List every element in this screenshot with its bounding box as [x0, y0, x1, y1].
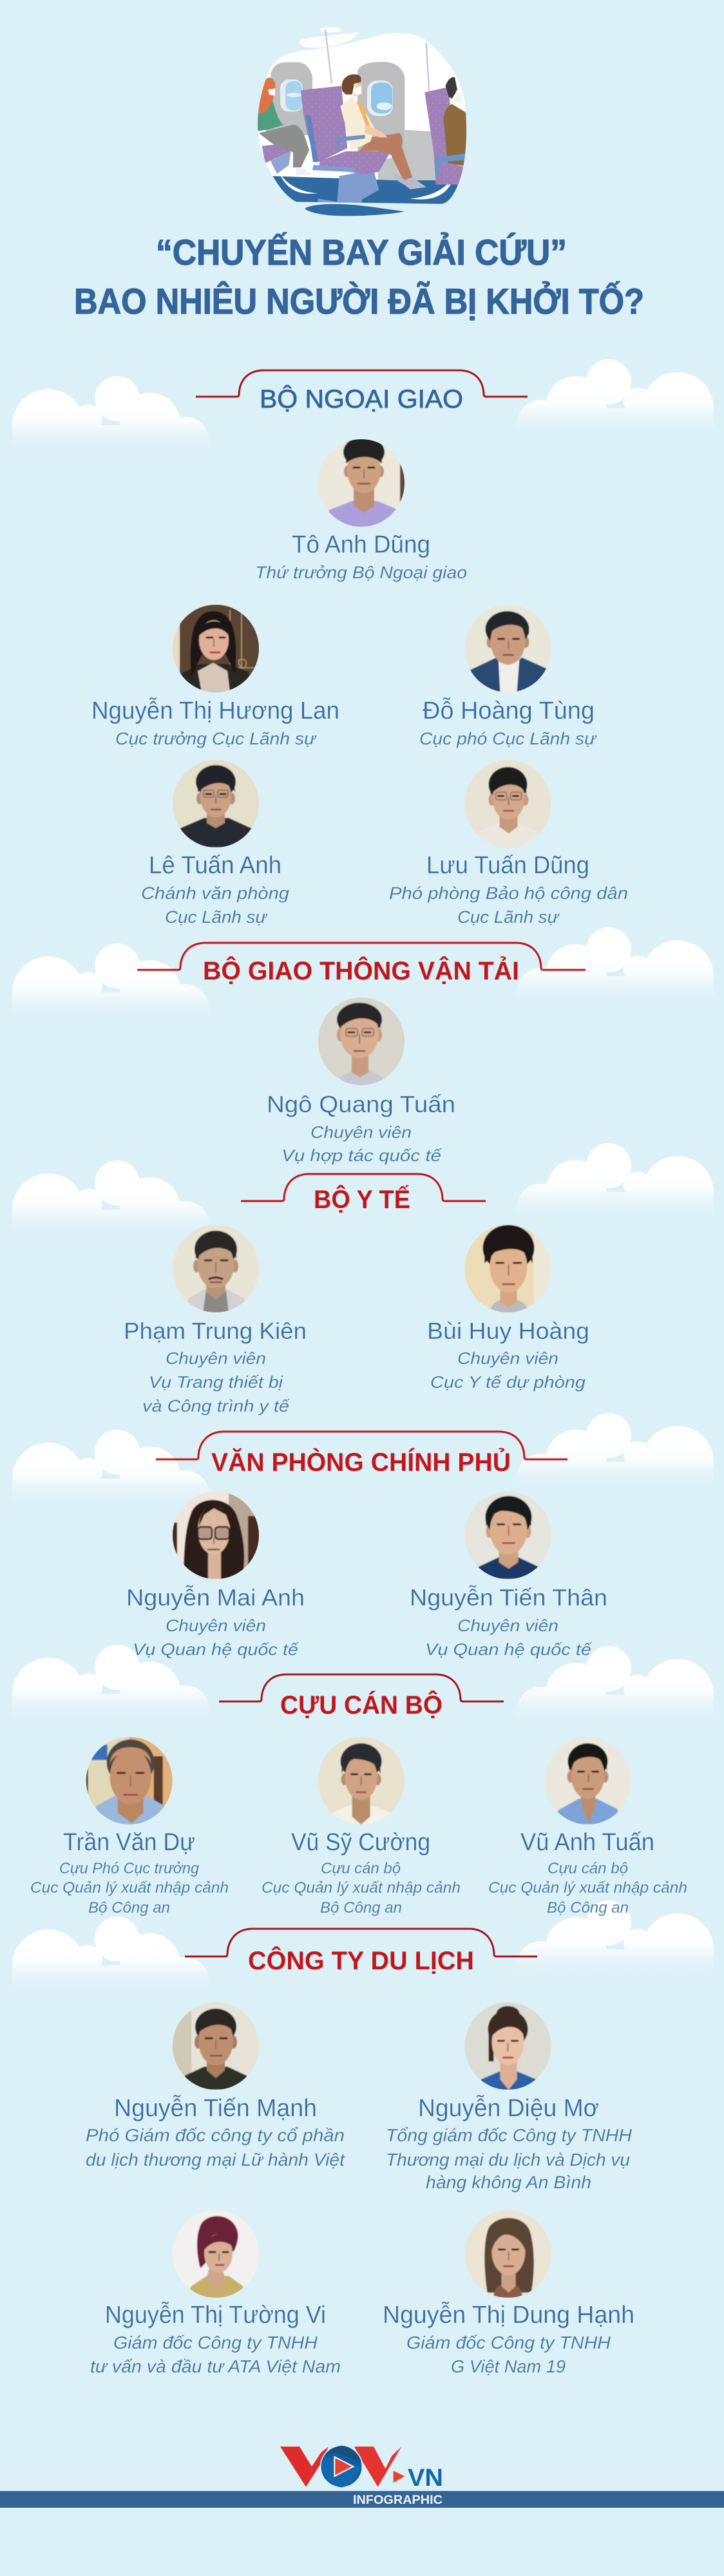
role: Chuyên viên: [457, 1616, 558, 1635]
person: Phạm Trung Kiên: [124, 1224, 307, 1416]
heading: Bộ Giao thông Vận tải: [137, 943, 586, 985]
title: “CHUYẾN BAY GIẢI CỨU”: [156, 232, 567, 272]
role: [86, 2125, 345, 2170]
photo: Nguyễn Thị Tường Vi: [171, 2209, 261, 2299]
heading: Bộ Ngoại giao: [196, 370, 528, 413]
logo: VOV.VN Infographic: [280, 2446, 443, 2507]
role: Cục Quản lý xuất nhập cảnh: [488, 1879, 687, 1897]
role: Vụ Quan hệ quốc tế: [425, 1640, 593, 1659]
role: G Việt Nam 19: [451, 2356, 566, 2376]
role: Cục Quản lý xuất nhập cảnh: [30, 1879, 229, 1897]
name: Nguyễn Diệu Mơ: [418, 2094, 599, 2122]
role: [141, 884, 289, 927]
role: Chánh văn phòng: [141, 884, 289, 903]
clouds behind section headings: [12, 359, 714, 2006]
photo: Lưu Tuấn Dũng: [462, 759, 553, 849]
name: Phạm Trung Kiên: [124, 1318, 307, 1344]
person: Trần Văn Dự: [30, 1736, 229, 1917]
person: Ngô Quang Tuấn: [267, 996, 455, 1165]
photo: Nguyễn Diệu Mơ: [462, 2001, 553, 2091]
photo: Đỗ Hoàng Tùng: [462, 603, 553, 694]
photo: Bùi Huy Hoàng: [462, 1224, 553, 1314]
person: Nguyễn Mai Anh: [126, 1490, 305, 1659]
person: Nguyễn Thị Tường Vi: [90, 2209, 341, 2376]
heading: Văn phòng Chính phủ: VĂN PHÒNG CHÍNH PHỦ: [211, 1447, 511, 1477]
photo: Tô Anh Dũng: [316, 437, 406, 528]
role: Bộ Công an: [547, 1899, 629, 1917]
panel: Bộ Giao thông Vận tải: [137, 943, 586, 1165]
role: [488, 1860, 687, 1917]
person: Đỗ Hoàng Tùng: [419, 603, 597, 748]
photo: Trần Văn Dự: [84, 1736, 175, 1826]
title: [74, 232, 644, 321]
photo: Lê Tuấn Anh: [171, 759, 261, 849]
logo: VOV.VN Infographic: VN: [408, 2465, 443, 2492]
person: Lê Tuấn Anh: [141, 759, 289, 927]
role: [281, 1122, 443, 1165]
role: Cục Y tế dự phòng: [430, 1372, 586, 1392]
role: Cục Lãnh sự: [457, 907, 560, 927]
role: và Công trình y tế: [142, 1396, 291, 1416]
role: Phó Giám đốc công ty cổ phần: [86, 2125, 345, 2145]
name: Vũ Sỹ Cường: [291, 1829, 430, 1856]
role: Cựu Phó Cục trưởng: [59, 1860, 200, 1877]
role: Chuyên viên: [310, 1122, 412, 1142]
photo: Nguyễn Thị Dung Hạnh: [462, 2209, 553, 2299]
role: Cục phó Cục Lãnh sự: [419, 729, 597, 748]
role: Giám đốc Công ty TNHH: [406, 2333, 611, 2353]
person: Nguyễn Thị Dung Hạnh: [383, 2209, 634, 2376]
name: Đỗ Hoàng Tùng: [423, 697, 595, 724]
role: tư vấn và đầu tư ATA Việt Nam: [90, 2356, 341, 2376]
person: Lưu Tuấn Dũng: [389, 759, 628, 927]
role: Tổng giám đốc Công ty TNHH: [386, 2125, 633, 2145]
role: du lịch thương mại Lữ hành Việt: [86, 2150, 345, 2170]
logo: VOV.VN Infographic: INFOGRAPHIC: [353, 2494, 443, 2507]
footer band: [0, 2491, 724, 2508]
role: Bộ Công an: [88, 1899, 170, 1917]
heading: Công ty du lịch: [185, 1929, 537, 1975]
role: Phó phòng Bảo hộ công dân: [389, 884, 628, 903]
role: Vụ Trang thiết bị: [149, 1372, 283, 1392]
role: Chuyên viên: [166, 1616, 266, 1635]
title: BAO NHIÊU NGƯỜI ĐÃ BỊ KHỞI TỐ?: [74, 281, 644, 321]
person: Nguyễn Thị Hương Lan: [91, 603, 339, 748]
name: Ngô Quang Tuấn: [267, 1091, 455, 1117]
role: [133, 1616, 300, 1659]
person: Tô Anh Dũng: [255, 437, 467, 582]
photo: Nguyễn Mai Anh: [171, 1490, 261, 1580]
name: Nguyễn Tiến Thân: [410, 1584, 607, 1611]
role: Cựu cán bộ: [321, 1860, 401, 1877]
illustration: passengers in airplane cabin: [258, 27, 466, 216]
person: Vũ Sỹ Cường: [262, 1736, 461, 1917]
role: Cựu cán bộ: [548, 1860, 628, 1877]
role: Bộ Công an: [320, 1899, 402, 1917]
photo: Nguyễn Tiến Mạnh: [171, 2001, 261, 2091]
photo: Nguyễn Tiến Thân: [462, 1490, 553, 1580]
role: [406, 2333, 611, 2376]
heading: Bộ Giao thông Vận tải: BỘ GIAO THÔNG VẬN TẢI: [203, 956, 519, 985]
role: [30, 1860, 229, 1917]
name: Nguyễn Thị Tường Vi: [105, 2301, 326, 2329]
panel: Văn phòng Chính phủ: [126, 1432, 607, 1659]
role: Vụ hợp tác quốc tế: [281, 1146, 443, 1165]
role: Cục trưởng Cục Lãnh sự: [115, 729, 317, 748]
name: Vũ Anh Tuấn: [520, 1829, 654, 1856]
name: Bùi Huy Hoàng: [427, 1318, 589, 1344]
role: [386, 2125, 633, 2192]
role: [262, 1860, 461, 1917]
heading: Cựu cán bộ: [219, 1674, 504, 1719]
role: Chuyên viên: [457, 1349, 558, 1368]
name: Nguyễn Mai Anh: [126, 1584, 305, 1611]
name: Trần Văn Dự: [63, 1829, 195, 1856]
role: Vụ Quan hệ quốc tế: [133, 1640, 300, 1659]
person: Nguyễn Tiến Mạnh: [86, 2001, 345, 2170]
heading: Bộ Y tế: BỘ Y TẾ: [314, 1184, 410, 1214]
role: Thương mại du lịch và Dịch vụ: [386, 2150, 630, 2170]
panel: Bộ Y tế: [124, 1174, 589, 1416]
photo: Phạm Trung Kiên: [171, 1224, 261, 1314]
photo: Ngô Quang Tuấn: [316, 996, 406, 1086]
name: Lê Tuấn Anh: [149, 852, 281, 879]
person: Nguyễn Tiến Thân: [410, 1490, 607, 1659]
role: Chuyên viên: [166, 1349, 266, 1368]
photo: Nguyễn Thị Hương Lan: [171, 603, 261, 694]
role: Thứ trưởng Bộ Ngoại giao: [255, 563, 467, 582]
name: Tô Anh Dũng: [292, 531, 430, 558]
role: [389, 884, 628, 927]
role: [142, 1349, 291, 1416]
role: [90, 2333, 341, 2376]
name: Lưu Tuấn Dũng: [426, 852, 589, 879]
heading: Cựu cán bộ: CỰU CÁN BỘ: [280, 1690, 443, 1719]
heading: Công ty du lịch: CÔNG TY DU LỊCH: [248, 1946, 474, 1975]
person: Bùi Huy Hoàng: [427, 1224, 589, 1392]
role: [430, 1349, 586, 1392]
heading: Bộ Ngoại giao: BỘ NGOẠI GIAO: [260, 384, 463, 413]
person: Vũ Anh Tuấn: [488, 1736, 687, 1917]
name: Nguyễn Thị Dung Hạnh: [383, 2301, 634, 2329]
name: Nguyễn Thị Hương Lan: [91, 697, 339, 724]
panel: Bộ Ngoại giao: [91, 370, 628, 927]
heading: Văn phòng Chính phủ: [156, 1432, 567, 1477]
person: Nguyễn Diệu Mơ: [386, 2001, 633, 2192]
panel: Cựu cán bộ: [30, 1674, 687, 1917]
role: Cục Quản lý xuất nhập cảnh: [262, 1879, 461, 1897]
role: Cục Lãnh sự: [165, 907, 268, 927]
panel: Công ty du lịch: [86, 1929, 634, 2376]
role: [425, 1616, 593, 1659]
role: Giám đốc Công ty TNHH: [113, 2333, 318, 2353]
photo: Vũ Anh Tuấn: [542, 1736, 633, 1826]
name: Nguyễn Tiến Mạnh: [114, 2094, 317, 2122]
role: hàng không An Bình: [426, 2172, 591, 2192]
photo: Vũ Sỹ Cường: [316, 1736, 406, 1826]
heading: Bộ Y tế: [241, 1174, 486, 1214]
